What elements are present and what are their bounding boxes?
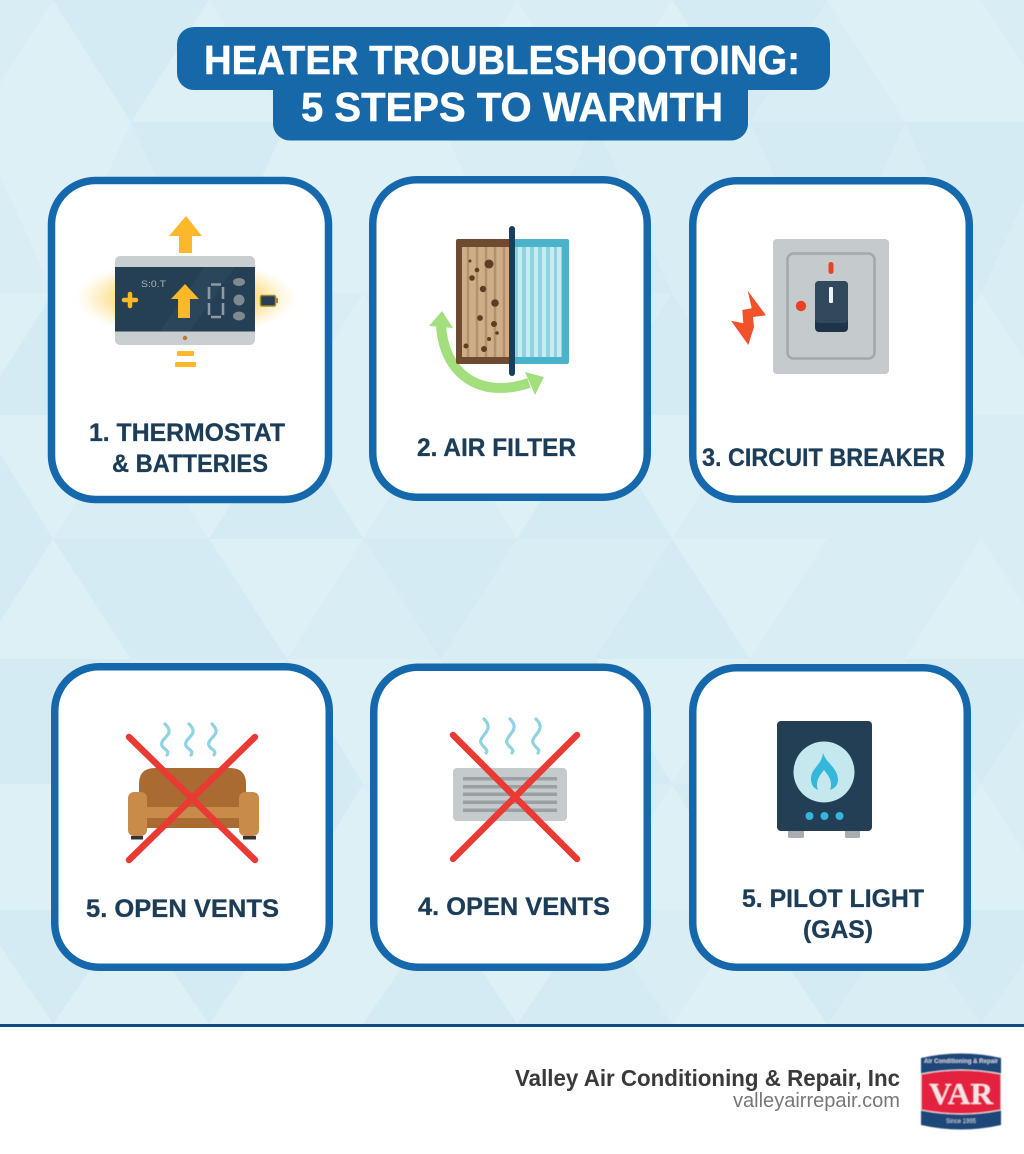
icon: gas furnace with flame xyxy=(777,721,872,838)
label: open vents 4: 4. OPEN VENTS xyxy=(418,893,610,921)
icon: company logo: Air Conditioning & Repair xyxy=(924,1059,999,1065)
label: air filter: 2. AIR FILTER xyxy=(417,434,576,462)
title text: HEATER TROUBLESHOOTOING: xyxy=(204,37,800,83)
panel: 5 open vents, sofa xyxy=(55,667,329,967)
label: thermostat: 1. THERMOSTAT xyxy=(89,419,285,447)
title text: 5 STEPS TO WARMTH xyxy=(301,84,723,130)
label: thermostat xyxy=(89,419,285,478)
website: valleyairrepair.com xyxy=(733,1090,900,1112)
icon: company logo: VAR xyxy=(929,1076,994,1111)
company name: Valley Air Conditioning & Repair, Inc xyxy=(515,1065,900,1091)
icon: company logo: Since 1995 xyxy=(946,1119,977,1125)
icon: company logo xyxy=(921,1054,1001,1130)
icon: thermostat: S:0.T xyxy=(141,279,166,290)
label: thermostat: & BATTERIES xyxy=(112,450,268,478)
label: pilot light: (GAS) xyxy=(803,916,873,944)
panel: 5 pilot light xyxy=(693,668,967,967)
icon: circuit breaker xyxy=(731,239,889,374)
label: open vents 5: 5. OPEN VENTS xyxy=(86,895,279,923)
label: circuit breaker: 3. CIRCUIT BREAKER xyxy=(702,444,945,472)
panel: 4 open vents xyxy=(374,667,647,967)
icon: blocked sofa xyxy=(128,724,259,860)
panel: 3 circuit breaker xyxy=(693,181,969,499)
panel: 2 air filter xyxy=(373,180,647,497)
label: pilot light: 5. PILOT LIGHT xyxy=(742,885,924,913)
title text xyxy=(204,37,800,130)
icon: air filter xyxy=(429,226,569,395)
footer xyxy=(0,1024,1024,1154)
title banner xyxy=(177,27,830,140)
panel: 1 thermostat and batteries xyxy=(52,180,328,500)
label: pilot light xyxy=(742,885,924,944)
icon: blocked vent xyxy=(453,719,577,859)
icon: thermostat xyxy=(74,216,298,367)
